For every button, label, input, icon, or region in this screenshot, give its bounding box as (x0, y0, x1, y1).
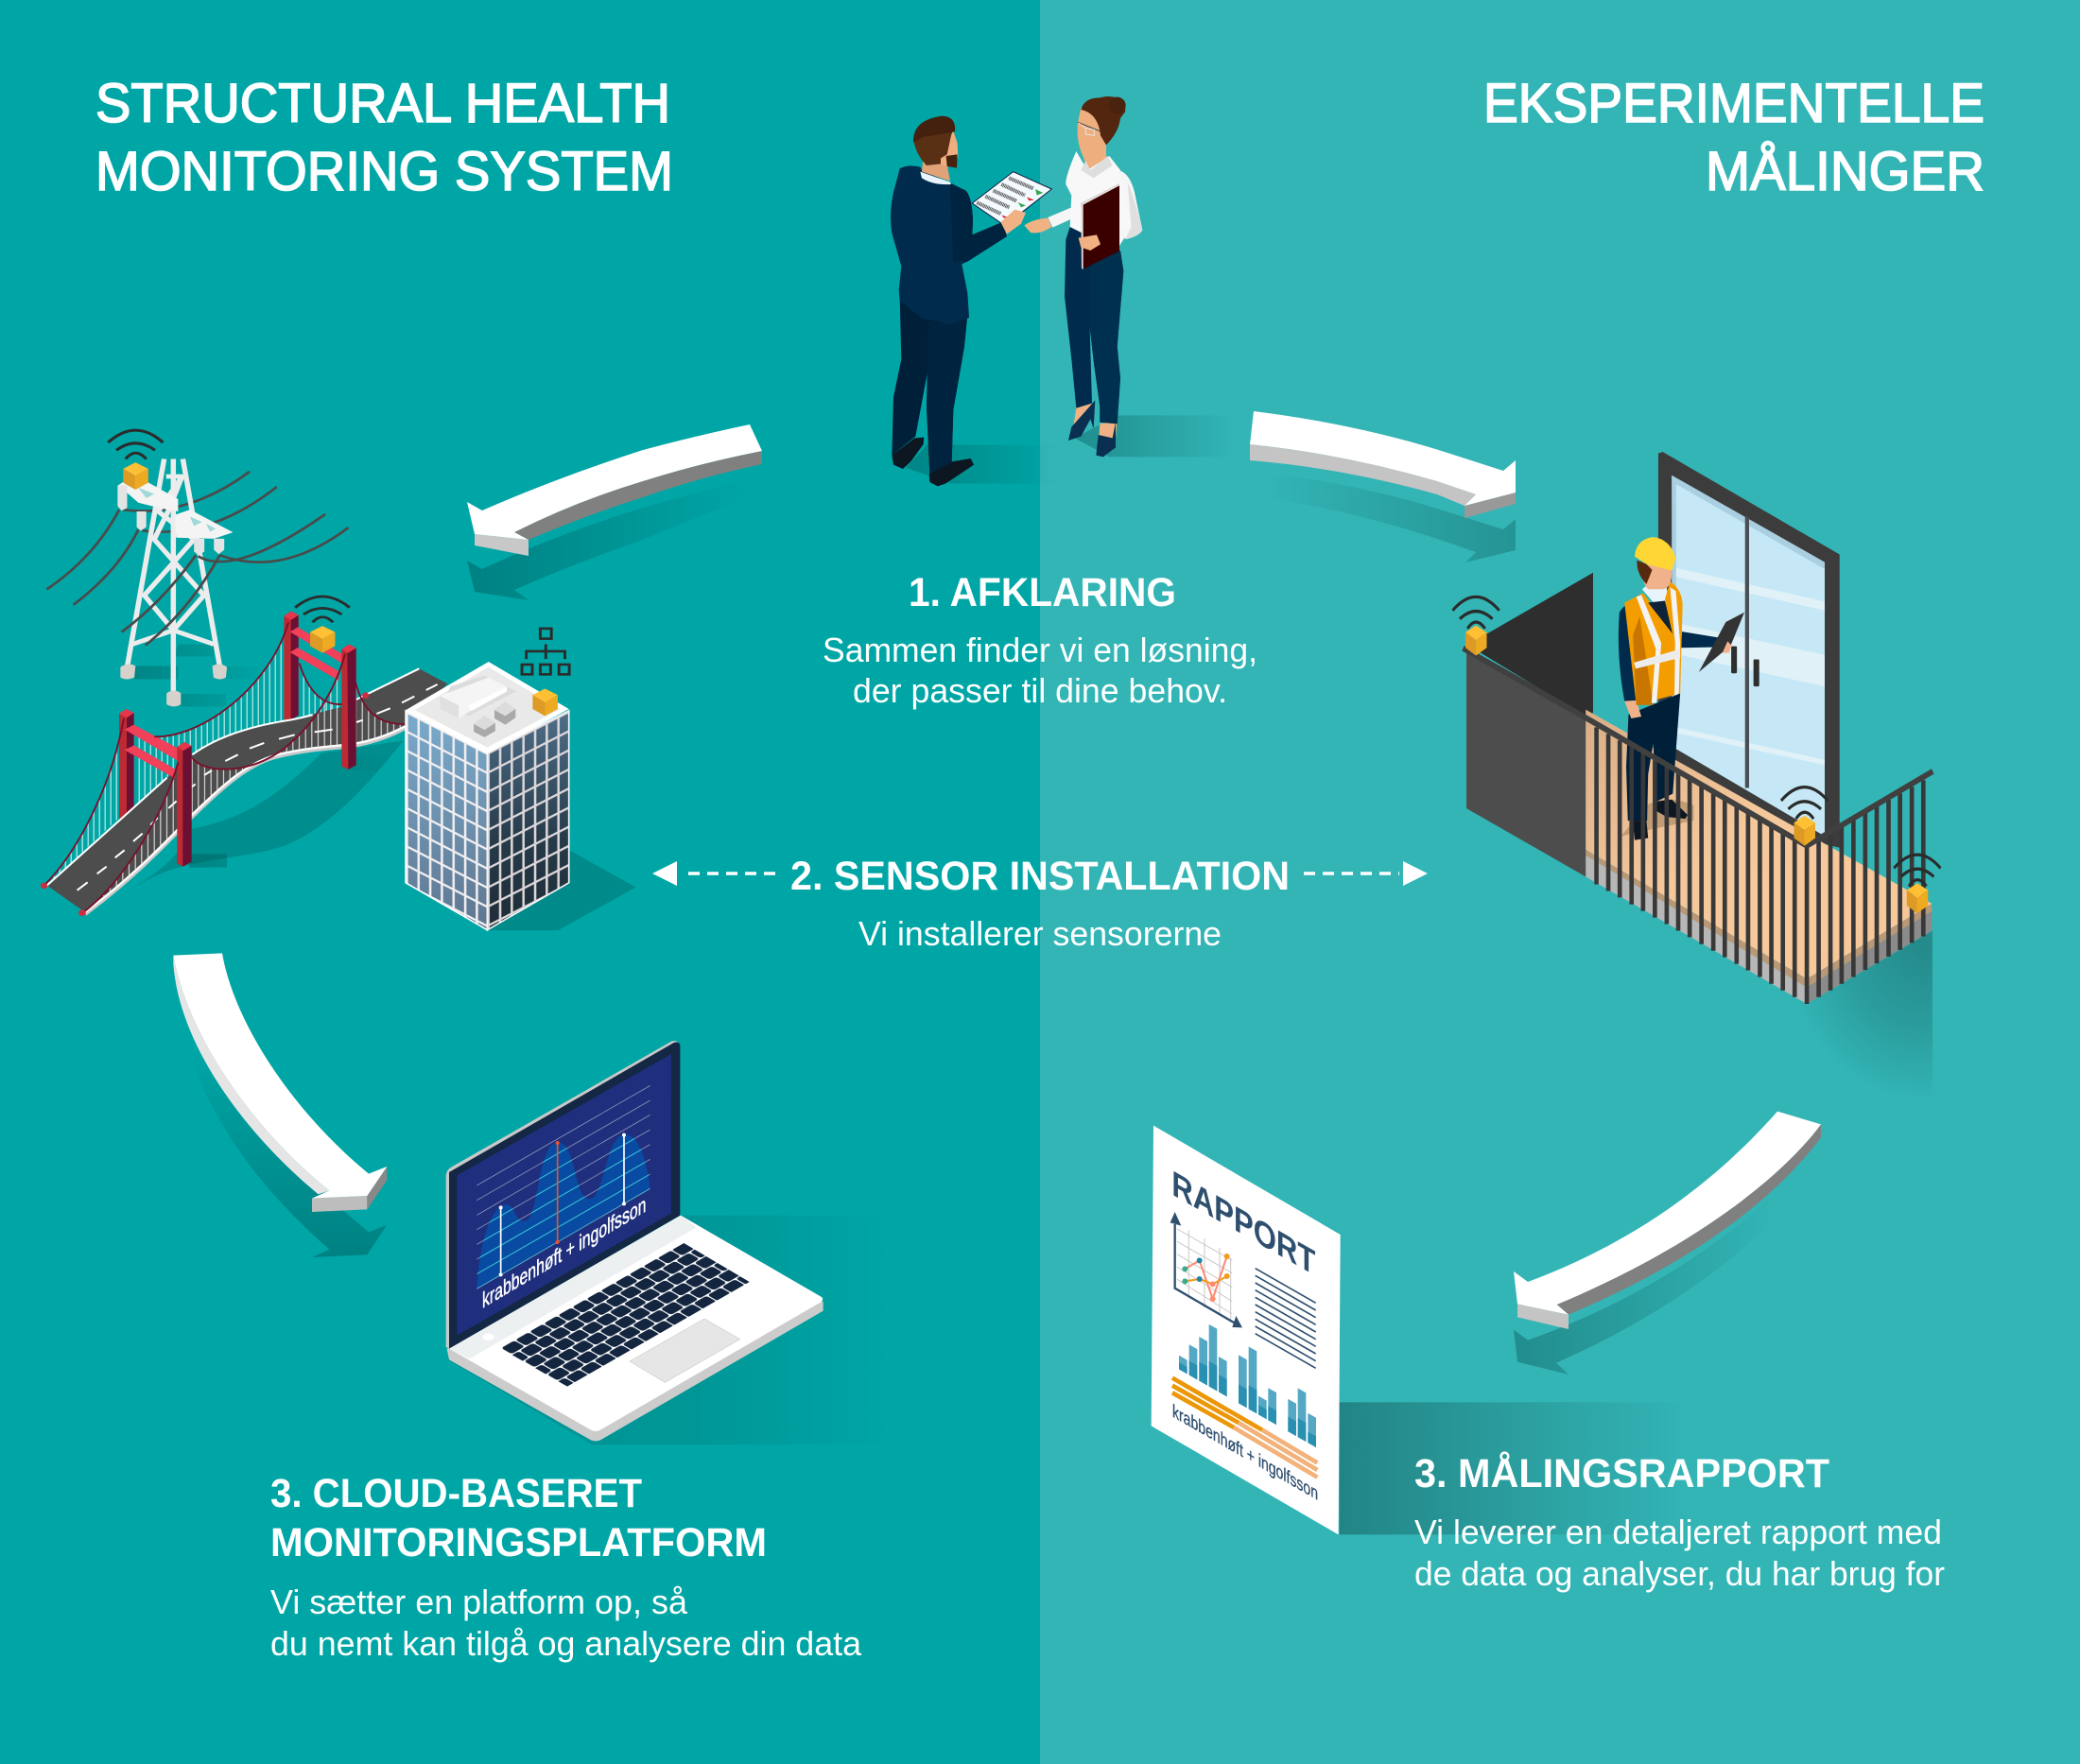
text block: step 3 measurement report (1414, 1451, 1945, 1593)
arrow top face (1250, 411, 1516, 506)
illustration: two people shaking hands (891, 96, 1239, 486)
illustration: balcony with engineer and sensors (1452, 452, 1940, 1102)
bar charts (1179, 1306, 1316, 1447)
deck edge (85, 728, 405, 914)
title: structural health monitoring system: MONITORING SYSTEM (95, 141, 673, 202)
text block: step 1 afklaring (823, 570, 1257, 710)
text block: step 3 measurement report: Vi leverer en detaljeret rapport med (1414, 1513, 1942, 1551)
text block: step 1 afklaring: der passer til dine behov. (853, 671, 1227, 710)
text block: step 3 cloud platform: Vi sætter en platform op, så (270, 1582, 688, 1621)
illustration: power tower, suspension bridge and office building (41, 430, 635, 930)
man in navy suit (891, 116, 1051, 486)
illustration: report document (1152, 1126, 1695, 1534)
engineer in safety vest (1619, 537, 1744, 840)
near tower columns (177, 742, 192, 867)
arrow shadow (187, 1046, 387, 1257)
text block: step 1 afklaring: Sammen finder vi en løsning, (823, 631, 1257, 669)
office building with sensor (406, 629, 635, 930)
area chart (477, 1134, 650, 1288)
text block: step 3 cloud platform: 3. CLOUD-BASERET (270, 1471, 642, 1516)
near hangers (83, 654, 405, 912)
text lines (1256, 1269, 1316, 1368)
text block: step 3 cloud platform: MONITORINGSPLATFORM (270, 1520, 767, 1565)
icon: network hierarchy (522, 629, 569, 674)
arrow side face (1557, 1124, 1821, 1315)
balcony floor (1586, 710, 1932, 1004)
report shadow (1340, 1402, 1695, 1534)
arrow: step 1 to right illustration (1250, 411, 1516, 562)
text block: step 1 afklaring: 1. AFKLARING (909, 570, 1176, 615)
bridge ground shadow (118, 740, 404, 896)
report brand text: krabbenhøft + ingolfsson (1172, 1401, 1318, 1505)
transmission tower with sensor (46, 430, 349, 706)
laptop screen (446, 1041, 680, 1349)
sensors and wifi icons (1452, 597, 1940, 913)
arrow shadow (1514, 1172, 1812, 1375)
man's floor shadow (906, 445, 1059, 484)
report title: RAPPORT (1171, 1163, 1316, 1284)
road surface (47, 668, 447, 912)
suspension bridge (41, 597, 447, 916)
arrow shadow (467, 477, 756, 600)
keyboard (500, 1243, 750, 1387)
tower cross beams (125, 627, 342, 778)
laptop floor shadow (447, 1216, 901, 1444)
text block: step 3 measurement report: de data og analyser, du har brug for (1414, 1554, 1945, 1593)
arrow: step 1 to left illustration (467, 424, 762, 600)
title: structural health monitoring system (95, 73, 673, 202)
arrow top face (173, 953, 387, 1199)
panel: right background (1040, 0, 2080, 1764)
door frame and glass (1658, 452, 1840, 848)
text block: step 3 measurement report: 3. MÅLINGSRAPPORT (1414, 1451, 1829, 1496)
report page (1152, 1126, 1341, 1534)
panel: left background (0, 0, 1040, 1764)
balcony shadow (1594, 887, 1933, 1102)
woman in white blouse with folder (1024, 96, 1142, 457)
illustration: laptop with monitoring dashboard (446, 1041, 823, 1444)
text block: step 3 cloud platform (270, 1471, 862, 1663)
railing (1463, 649, 1933, 1004)
arrow top face (467, 424, 762, 540)
progress stripes (1172, 1378, 1317, 1478)
line chart (1170, 1212, 1242, 1327)
text block: step 2 sensor installation: 2. SENSOR INSTALLATION (790, 854, 1290, 899)
arrow side face (1250, 444, 1476, 506)
title: structural health monitoring system: STRUCTURAL HEALTH (95, 73, 670, 134)
arrow: dashed double-headed right (1304, 861, 1428, 886)
arrow: balcony down to report (1514, 1112, 1821, 1375)
side wall (1466, 648, 1586, 876)
touchpad (630, 1319, 740, 1382)
back wall (1478, 573, 1593, 717)
arrow side face (514, 451, 762, 540)
text block: step 2 sensor installation: Vi installerer sensorerne (858, 914, 1222, 953)
arrow side face (173, 956, 329, 1194)
arrow shadow (1257, 473, 1516, 562)
title: eksperimentelle målinger (1483, 73, 1985, 202)
text block: step 2 sensor installation (790, 854, 1290, 953)
cables in front of tower (122, 514, 349, 646)
arrow: left illustration down to laptop (173, 953, 387, 1257)
arrow: dashed double-headed left (652, 861, 777, 886)
text block: step 3 cloud platform: du nemt kan tilgå og analysere din data (270, 1624, 862, 1663)
title: eksperimentelle målinger: MÅLINGER (1706, 141, 1985, 202)
main cables (44, 622, 405, 912)
clipboard (972, 172, 1051, 223)
far tower columns (119, 709, 134, 820)
laptop base (447, 1302, 823, 1441)
far hangers (45, 622, 342, 886)
arrow top face (1514, 1112, 1821, 1315)
woman's floor shadow (1075, 415, 1239, 457)
screen brand text: krabbenhøft + ingolfsson (482, 1191, 646, 1313)
title: eksperimentelle målinger: EKSPERIMENTELLE (1483, 73, 1985, 134)
